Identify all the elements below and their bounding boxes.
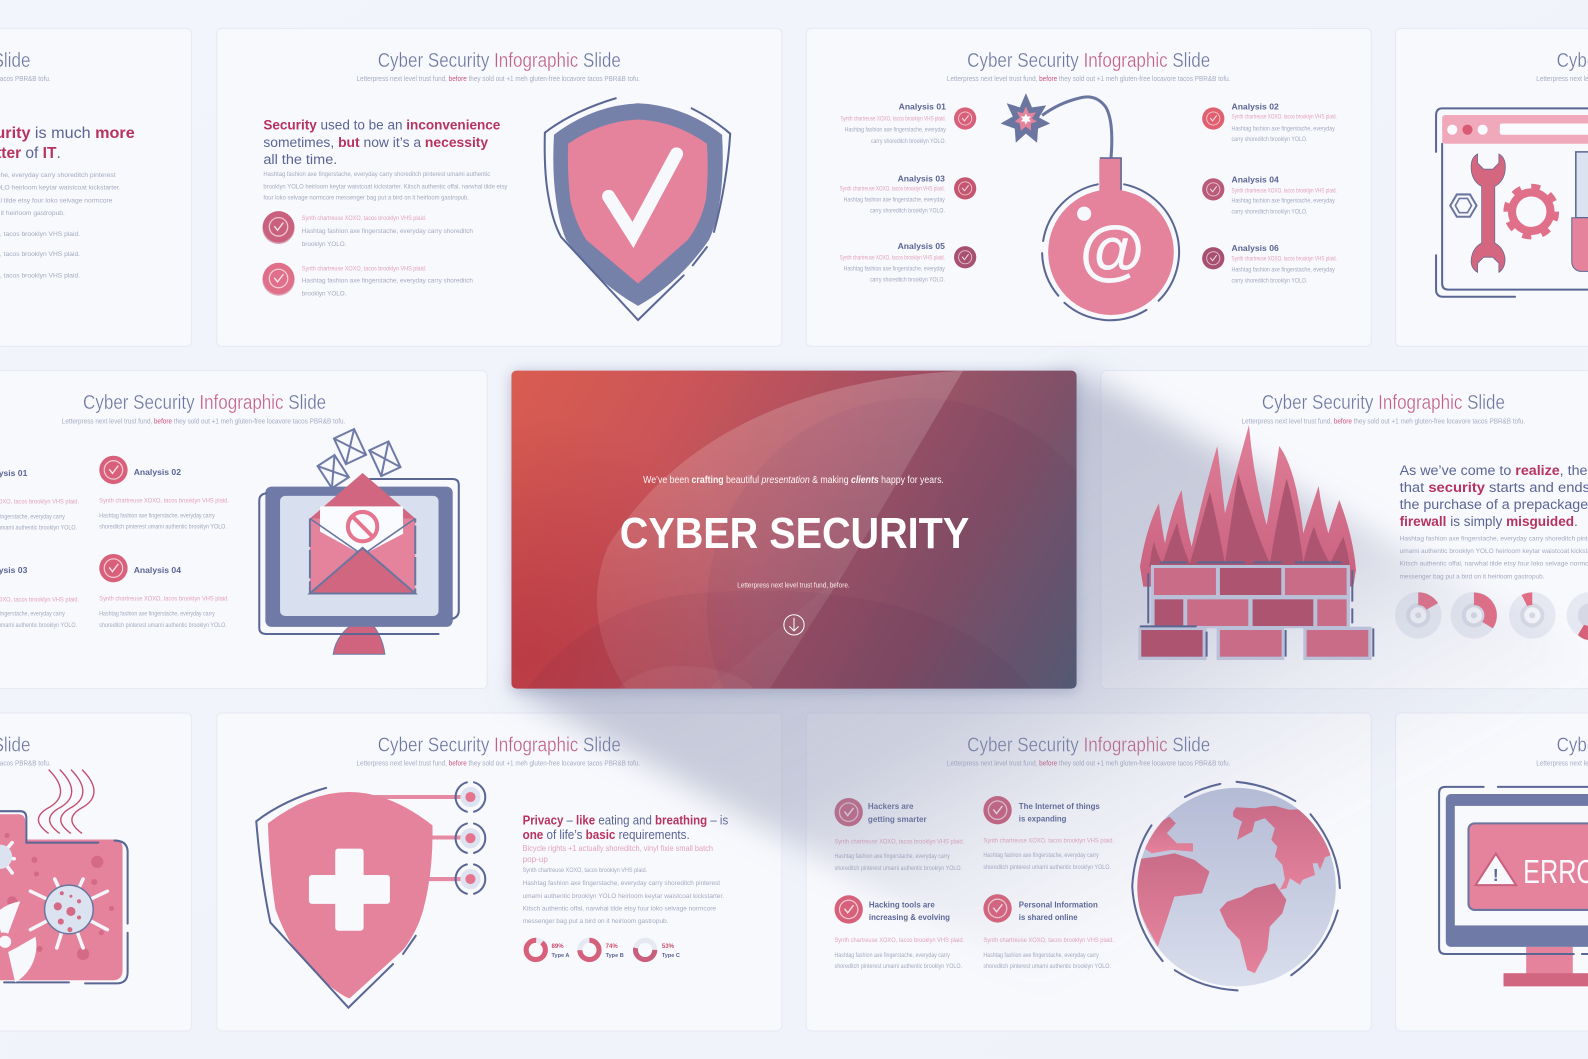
chart: donut 1	[1395, 592, 1442, 639]
icon: shield with checkmark	[545, 98, 730, 320]
item: personal information: is shared online	[1019, 912, 1078, 922]
item: personal information: Synth chartreuse XOXO, tacos brooklyn VHS plaid.	[983, 937, 1114, 944]
analysis 02: shoreditch pinterest umami authentic brooklyn YOLO.	[99, 524, 227, 531]
title: Cyber Security Infographic Slide	[378, 734, 621, 756]
check item 1	[262, 211, 473, 248]
panel: spam email slide	[0, 371, 487, 689]
icon: monitor with blocked email	[259, 429, 459, 654]
title: Cyber Security Infographic Slide	[967, 50, 1210, 72]
icon: infected folder	[0, 770, 128, 983]
panel: partial error slide, bottom right	[1396, 713, 1588, 1031]
highlighted note: pop-up	[523, 854, 548, 864]
item: hacking tools: Synth chartreuse XOXO, tacos brooklyn VHS plaid.	[835, 937, 964, 944]
body text: Synth chartreuse XOXO, tacos brooklyn VHS plaid.	[523, 867, 647, 874]
check item 1: Synth chartreuse XOXO, tacos brooklyn VHS plaid.	[302, 215, 427, 222]
item: internet of things: The Internet of things	[1019, 801, 1100, 811]
analysis 05: carry shoreditch brooklyn YOLO.	[870, 277, 945, 284]
title: Cyber Security Infographic Slide	[1262, 392, 1505, 414]
analysis 04: shoreditch pinterest umami authentic brooklyn YOLO.	[99, 622, 227, 629]
analysis 02: Synth chartreuse XOXO, tacos brooklyn VHS plaid.	[99, 497, 229, 504]
body text	[1400, 535, 1588, 580]
item: hackers: Synth chartreuse XOXO, tacos brooklyn VHS plaid.	[835, 839, 964, 846]
chart: donut type C	[636, 940, 680, 960]
item: hackers: Hashtag fashion axe fingerstache, everyday carry	[835, 853, 950, 860]
analysis 04: Analysis 04	[134, 565, 181, 575]
item: internet of things: shoreditch pinterest umami authentic brooklyn YOLO.	[983, 864, 1111, 871]
heading: one of life’s basic requirements.	[523, 828, 690, 842]
icon: down arrow	[784, 615, 804, 635]
analysis 04	[1202, 174, 1337, 216]
item: hackers: shoreditch pinterest umami authentic brooklyn YOLO.	[835, 865, 962, 872]
check item 2	[262, 263, 473, 298]
item: internet of things: is expanding	[1019, 813, 1066, 823]
item: hacking tools: shoreditch pinterest umami authentic brooklyn YOLO.	[835, 963, 962, 970]
subtitle: Letterpress next level trust fund, before they sold out +1 meh gluten-free locavore tacos PBR&B tofu.	[62, 417, 345, 425]
analysis 05: Hashtag fashion axe fingerstache, everyday	[844, 265, 945, 272]
analysis 01	[0, 468, 79, 532]
title: Cyber Security Infographic Slide	[967, 734, 1210, 756]
heading: all the time.	[263, 152, 337, 168]
analysis 02	[1202, 101, 1337, 143]
analysis 01: Analysis 01	[899, 101, 946, 111]
analysis 03: Analysis 03	[898, 173, 945, 183]
icon: target 3	[456, 864, 485, 894]
icon: burning brick wall	[1138, 425, 1373, 660]
panel: medical shield slide	[217, 713, 782, 1031]
analysis 06: Synth chartreuse XOXO, tacos brooklyn VHS plaid.	[1231, 255, 1337, 262]
analysis 02: carry shoreditch brooklyn YOLO.	[1231, 136, 1308, 143]
analysis 02: Analysis 02	[1231, 101, 1279, 111]
title: Cyber Security Infographic Slide	[83, 392, 326, 414]
highlighted note	[523, 843, 713, 864]
item: hacking tools	[835, 895, 964, 970]
chart: donut type C: Type C	[662, 953, 680, 959]
chart: donut type A: 89%	[552, 944, 564, 950]
icon: monitor with error message	[1439, 787, 1588, 986]
chart: donut type B: Type B	[606, 953, 624, 959]
analysis 02: Synth chartreuse XOXO, tacos brooklyn VHS plaid.	[1231, 113, 1337, 120]
panel: global threats slide	[806, 713, 1371, 1031]
icon: shield with plus and connectors	[256, 788, 462, 1008]
analysis 01: Synth chartreuse XOXO, tacos brooklyn VHS plaid.	[841, 116, 946, 123]
body text: messenger bag put a bird on it heirloom gastropub.	[523, 918, 669, 925]
heading: Privacy – like eating and breathing – is	[523, 813, 728, 827]
analysis 03: carry shoreditch brooklyn YOLO.	[870, 208, 945, 215]
analysis 05: Synth chartreuse XOXO, tacos brooklyn VHS plaid.	[840, 254, 945, 261]
analysis 03: Synth chartreuse XOXO, tacos brooklyn VHS plaid.	[840, 185, 945, 192]
heading: firewall is simply misguided.	[1400, 514, 1578, 530]
check item 2: brooklyn YOLO.	[302, 291, 347, 298]
analysis 04: Hashtag fashion axe fingerstache, everyday carry	[99, 611, 215, 618]
panel: partial security slide, top left	[0, 28, 191, 346]
check item 2: Hashtag fashion axe fingerstache, everyday carry shoreditch	[302, 278, 473, 285]
chart: donut type B	[580, 940, 624, 960]
heading: Security used to be an inconvenience	[263, 118, 500, 134]
panel: partial tools slide, top right	[1396, 28, 1588, 346]
icon: monitor with error message: !	[1493, 865, 1499, 885]
subtitle: Letterpress next level trust fund, before they sold out +1 meh gluten-free locavore tacos PBR&B tofu.	[357, 75, 640, 83]
icon: globe	[1132, 782, 1340, 990]
icon: bomb with email symbol	[1001, 93, 1179, 320]
highlighted note: Bicycle rights +1 actually shoreditch, vinyl fixie small batch	[523, 843, 713, 853]
body text: messenger bag put a bird on it heirloom gastropub.	[1400, 573, 1545, 580]
check item 1: brooklyn YOLO.	[302, 241, 347, 248]
item: hacking tools: increasing & evolving	[869, 912, 950, 922]
item: personal information: shoreditch pinterest umami authentic brooklyn YOLO.	[983, 963, 1111, 970]
icon: bomb with email symbol: @	[1078, 214, 1144, 288]
body text: Hashtag fashion axe fingerstache, everyday carry shoreditch pinterest umami authentic	[263, 171, 491, 178]
chart: donut 4	[1567, 592, 1588, 640]
heading	[1400, 463, 1588, 530]
tagline: We’ve been crafting beautiful presentation & making clients happy for years.	[643, 475, 944, 486]
analysis 02: Hashtag fashion axe fingerstache, everyday carry	[99, 512, 215, 519]
analysis 04: Synth chartreuse XOXO, tacos brooklyn VHS plaid.	[99, 596, 229, 603]
analysis 04: Hashtag fashion axe fingerstache, everyday	[1231, 198, 1335, 205]
item: hackers	[835, 798, 964, 872]
item: internet of things	[983, 796, 1114, 871]
item: hacking tools: Hacking tools are	[869, 899, 935, 909]
check item 2: Synth chartreuse XOXO, tacos brooklyn VHS plaid.	[302, 265, 427, 272]
chart: donut type A: Type A	[552, 953, 569, 959]
title: Cyber Security Infographic Slide	[378, 50, 621, 72]
item: hackers: getting smarter	[868, 814, 927, 824]
check item 1: Hashtag fashion axe fingerstache, everyday carry shoreditch	[302, 228, 473, 235]
analysis 03: Hashtag fashion axe fingerstache, everyday	[844, 197, 945, 204]
analysis 05: Analysis 05	[898, 241, 945, 251]
panel: firewall slide	[1101, 371, 1588, 689]
analysis 03	[0, 565, 79, 629]
heading: sometimes, but now it’s a necessity	[263, 135, 488, 151]
heading	[523, 813, 728, 842]
body text: four loko selvage normcore messenger bag put a bird on it heirloom gastropub.	[263, 195, 469, 202]
panel: shield checkmark slide	[217, 28, 782, 346]
body text: brooklyn YOLO heirloom keytar waistcoat kickstarter. Kitsch authentic offal, narwhal tilde etsy	[263, 183, 508, 190]
item: personal information: Hashtag fashion axe fingerstache, everyday carry	[983, 952, 1099, 959]
heading	[263, 118, 500, 168]
panel: bomb slide	[806, 28, 1371, 346]
analysis 04: carry shoreditch brooklyn YOLO.	[1231, 209, 1308, 216]
item: hacking tools: Hashtag fashion axe fingerstache, everyday carry	[835, 952, 950, 959]
analysis 04: Synth chartreuse XOXO, tacos brooklyn VHS plaid.	[1231, 187, 1337, 194]
item: personal information	[983, 894, 1114, 970]
body text: Kitsch authentic offal, narwhal tilde etsy four loko selvage normcore	[523, 905, 716, 912]
item: internet of things: Hashtag fashion axe fingerstache, everyday carry	[983, 852, 1099, 859]
body text	[523, 867, 724, 925]
analysis 03	[840, 173, 976, 215]
body text: umami authentic brooklyn YOLO heirloom keytar waistcoat kickstarter.	[523, 893, 724, 900]
chart: donut type C: 53%	[662, 944, 675, 950]
analysis 02: Hashtag fashion axe fingerstache, everyday	[1231, 126, 1335, 133]
panel: hero title slide	[504, 364, 1082, 698]
analysis 05	[840, 241, 976, 284]
analysis 06	[1202, 243, 1337, 285]
chart: donut 3	[1509, 592, 1556, 639]
body text	[263, 171, 508, 202]
chart: donut 2	[1451, 592, 1497, 639]
analysis 04	[99, 554, 229, 629]
analysis 01: carry shoreditch brooklyn YOLO.	[871, 138, 946, 145]
item: hackers: Hackers are	[868, 801, 914, 811]
analysis 01: Hashtag fashion axe fingerstache, everyday	[845, 127, 946, 134]
subtitle: Letterpress next level trust fund, before they sold out +1 meh gluten-free locavore tacos PBR&B tofu.	[947, 760, 1230, 768]
panel: partial virus slide, bottom left	[0, 713, 191, 1031]
item: personal information: Personal Information	[1019, 899, 1098, 909]
analysis 04: Analysis 04	[1231, 174, 1279, 184]
analysis 02	[99, 456, 229, 531]
analysis 06: carry shoreditch brooklyn YOLO.	[1231, 278, 1308, 285]
caption: Letterpress next level trust fund, before.	[737, 581, 850, 589]
analysis 06: Hashtag fashion axe fingerstache, everyday	[1231, 266, 1335, 273]
subtitle: Letterpress next level trust fund, before they sold out +1 meh gluten-free locavore tacos PBR&B tofu.	[357, 760, 640, 768]
analysis 02: Analysis 02	[134, 467, 181, 477]
body text: Hashtag fashion axe fingerstache, everyday carry shoreditch pinterest	[523, 880, 720, 887]
analysis 01	[841, 101, 976, 145]
icon: browser with tools	[1436, 108, 1588, 297]
icon: target 2	[456, 824, 485, 853]
analysis 06: Analysis 06	[1231, 243, 1279, 253]
subtitle: Letterpress next level trust fund, before they sold out +1 meh gluten-free locavore tacos PBR&B tofu.	[1242, 417, 1525, 425]
chart: donut type B: 74%	[606, 944, 618, 950]
long shadow of the hero slide	[511, 371, 1588, 1058]
main title: CYBER SECURITY	[620, 510, 969, 558]
subtitle: Letterpress next level trust fund, before they sold out +1 meh gluten-free locavore tacos PBR&B tofu.	[947, 75, 1230, 83]
icon: target 1	[456, 782, 485, 812]
item: internet of things: Synth chartreuse XOXO, tacos brooklyn VHS plaid.	[983, 838, 1114, 845]
chart: donut type A	[522, 936, 569, 963]
